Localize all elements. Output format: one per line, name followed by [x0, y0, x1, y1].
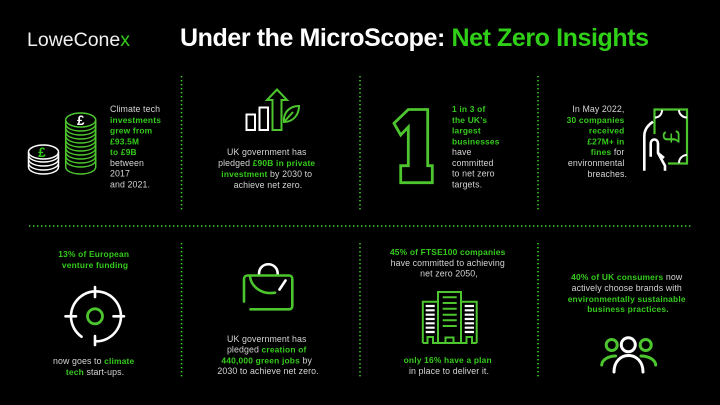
icon: growth bars, arrow and leaf	[246, 90, 299, 130]
text: one in three: targets.	[452, 180, 482, 190]
text: climate tech start-ups: now goes to climate	[53, 356, 134, 366]
icon: coin stacks: £	[77, 113, 85, 128]
icon: hand holding banknote: £	[658, 130, 686, 143]
text: consumer preference: environmentally sustainable	[568, 294, 686, 304]
icon: coin stacks: £	[38, 145, 46, 160]
text: investments growth: £93.5M	[110, 136, 139, 146]
logo: LoweConex: LoweConex	[27, 30, 131, 51]
text: fines: In May 2022,	[572, 104, 624, 114]
text: green jobs: 2030 to achieve net zero.	[217, 366, 319, 376]
text: only 16 percent: only 16% have a plan	[404, 355, 492, 365]
text: fines: 30 companies	[567, 115, 625, 125]
text: fines: breaches.	[587, 169, 627, 179]
text: investments growth: Climate tech	[110, 104, 160, 114]
title: Under the MicroScope: Net Zero Insights	[180, 24, 649, 52]
text: private investment: UK government has	[227, 147, 307, 157]
icon: coin stacks	[28, 113, 96, 174]
panel: private investment pledge	[218, 90, 318, 190]
text: one in three: have	[452, 147, 471, 157]
text: one in three: committed	[452, 158, 493, 168]
text: investments growth: investments	[110, 115, 161, 125]
icon: target crosshair	[66, 287, 124, 345]
icon: shopping bag	[244, 264, 292, 309]
panel: European venture funding	[53, 249, 137, 377]
text: FTSE100 commitment: net zero 2050,	[420, 268, 478, 278]
text: climate tech start-ups: tech start-ups.	[66, 367, 124, 377]
icon: group of people	[602, 338, 656, 372]
text: green jobs: UK government has	[227, 334, 307, 344]
text: one in three: largest	[452, 126, 481, 136]
text: fines: fines for	[591, 147, 624, 157]
text: fines: environmental	[568, 158, 624, 168]
text: investments growth: 2017	[110, 168, 130, 178]
text: fines: received	[589, 126, 624, 136]
text: one in three: the UK’s	[452, 115, 487, 125]
panel: climate tech investments	[28, 104, 164, 190]
text: consumer preference: business practices.	[587, 304, 669, 314]
text: consumer preference: 40% of UK consumers now	[571, 272, 682, 282]
text: private investment: achieve net zero.	[234, 180, 302, 190]
text: investments growth: between	[110, 158, 144, 168]
panel: green jobs	[217, 264, 319, 376]
panel: 1 in 3 businesses	[394, 104, 502, 190]
text: venture funding share: venture funding	[62, 260, 128, 270]
text: green jobs: 440,000 green jobs by	[221, 356, 312, 366]
text: private investment: pledged £90B in private	[218, 158, 315, 168]
text: consumer preference: actively choose brands with	[572, 283, 682, 293]
text: private investment: investment by 2030 to	[221, 169, 312, 179]
text: green jobs: pledged creation of	[227, 344, 307, 354]
text: one in three: to net zero	[452, 168, 495, 178]
text: venture funding share: 13% of European	[58, 249, 129, 259]
text: fines: £27M+ in	[587, 136, 624, 146]
text: FTSE100 commitment: 45% of FTSE100 companies	[390, 247, 506, 257]
text: one in three: businesses	[452, 136, 500, 146]
text: investments growth: grew from	[110, 126, 152, 136]
text: one in three: 1 in 3 of	[452, 104, 485, 114]
panel: FTSE100 commitments	[390, 247, 508, 376]
icon: outlined number one	[394, 110, 432, 183]
panel: UK consumers	[568, 272, 688, 372]
panel: environmental fines	[567, 104, 687, 179]
text: FTSE100 commitment: have committed to achieving	[391, 258, 505, 268]
text: investments growth: and 2021.	[110, 180, 150, 190]
icon: office buildings	[423, 292, 477, 343]
text: only 16 percent: in place to deliver it.	[409, 366, 489, 376]
text: investments growth: to £9B	[110, 147, 137, 157]
